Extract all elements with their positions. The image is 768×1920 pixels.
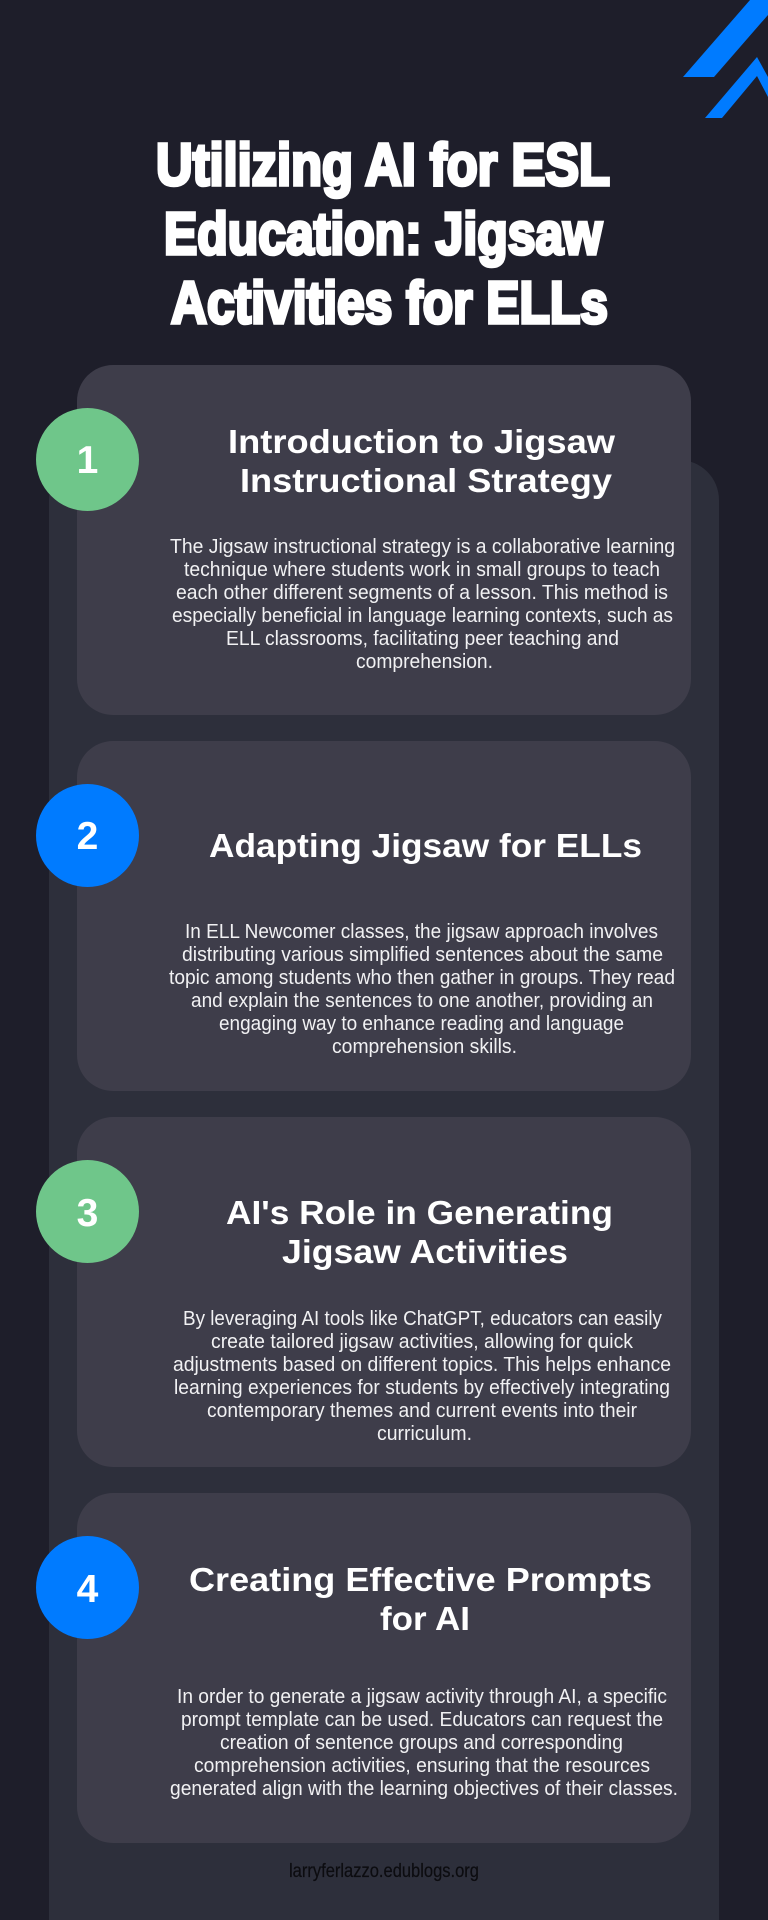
step 2 card xyxy=(77,741,691,1091)
step 1 body text: ELL classrooms, facilitating peer teaching and xyxy=(226,627,619,650)
panel: step 1 xyxy=(36,365,691,715)
title xyxy=(156,132,610,336)
step 2 heading: Adapting Jigsaw for ELLs xyxy=(209,828,642,865)
title: Activities for ELLs xyxy=(171,270,608,336)
step 4 body text: creation of sentence groups and corresponding xyxy=(220,1731,623,1754)
step 3 body text: contemporary themes and current events into their xyxy=(207,1399,637,1422)
icon: blue chevron arrows xyxy=(683,0,768,118)
step 1 heading xyxy=(228,424,616,500)
footer source: larryferlazzo.edublogs.org xyxy=(289,1861,479,1882)
title: Utilizing AI for ESL xyxy=(156,132,610,198)
step 4 body text xyxy=(170,1685,678,1800)
step 4 body text: prompt template can be used. Educators can request the xyxy=(181,1708,663,1731)
step 1 body text: each other different segments of a lesson. This method is xyxy=(176,581,668,604)
step 3 heading: Jigsaw Activities xyxy=(282,1234,568,1271)
panel: step 3 xyxy=(36,1117,691,1467)
step 1 body text: especially beneficial in language learning contexts, such as xyxy=(172,604,673,627)
panel: background column xyxy=(49,460,719,1920)
step 1 body text: The Jigsaw instructional strategy is a collaborative learning xyxy=(170,535,675,558)
step 3 body text: learning experiences for students by effectively integrating xyxy=(174,1376,670,1399)
step 2 number badge xyxy=(36,784,139,887)
step 1 body text: comprehension. xyxy=(356,650,493,673)
step 1 card xyxy=(77,365,691,715)
step 4 number badge xyxy=(36,1536,139,1639)
step 4 body text: generated align with the learning objectives of their classes. xyxy=(170,1777,678,1800)
step 2 body text: comprehension skills. xyxy=(332,1035,517,1058)
step 3 heading: AI's Role in Generating xyxy=(226,1195,613,1232)
step 1 number badge: 1 xyxy=(77,439,98,482)
step 1 heading: Instructional Strategy xyxy=(240,463,612,500)
step 2 body text xyxy=(169,920,675,1058)
step 4 number badge: 4 xyxy=(77,1568,99,1611)
step 4 heading: Creating Effective Prompts xyxy=(189,1562,652,1599)
step 1 heading: Introduction to Jigsaw xyxy=(228,424,616,461)
step 4 card xyxy=(77,1493,691,1843)
step 2 body text: and explain the sentences to one another, providing an xyxy=(191,989,653,1012)
step 3 body text: create tailored jigsaw activities, allowing for quick xyxy=(211,1330,634,1353)
step 2 body text: topic among students who then gather in groups. They read xyxy=(169,966,675,989)
step 3 heading xyxy=(226,1195,613,1271)
step 2 body text: In ELL Newcomer classes, the jigsaw approach involves xyxy=(185,920,658,943)
panel: step 4 xyxy=(36,1493,691,1843)
title: Education: Jigsaw xyxy=(164,201,602,267)
step 1 body text: technique where students work in small groups to teach xyxy=(184,558,660,581)
step 4 body text: In order to generate a jigsaw activity through AI, a specific xyxy=(177,1685,667,1708)
step 3 number badge: 3 xyxy=(77,1192,98,1235)
step 4 heading xyxy=(189,1562,652,1638)
step 3 body text xyxy=(173,1307,671,1445)
step 2 body text: engaging way to enhance reading and language xyxy=(219,1012,624,1035)
step 4 heading: for AI xyxy=(380,1601,470,1638)
step 4 body text: comprehension activities, ensuring that the resources xyxy=(194,1754,650,1777)
step 3 body text: curriculum. xyxy=(377,1422,472,1445)
step 3 body text: By leveraging AI tools like ChatGPT, educators can easily xyxy=(183,1307,663,1330)
step 2 body text: distributing various simplified sentences about the same xyxy=(182,943,663,966)
step 1 body text xyxy=(170,535,675,673)
step 3 number badge xyxy=(36,1160,139,1263)
step 1 number badge xyxy=(36,408,139,511)
step 2 number badge: 2 xyxy=(77,815,98,858)
step 3 body text: adjustments based on different topics. This helps enhance xyxy=(173,1353,671,1376)
step 3 card xyxy=(77,1117,691,1467)
panel: step 2 xyxy=(36,741,691,1091)
